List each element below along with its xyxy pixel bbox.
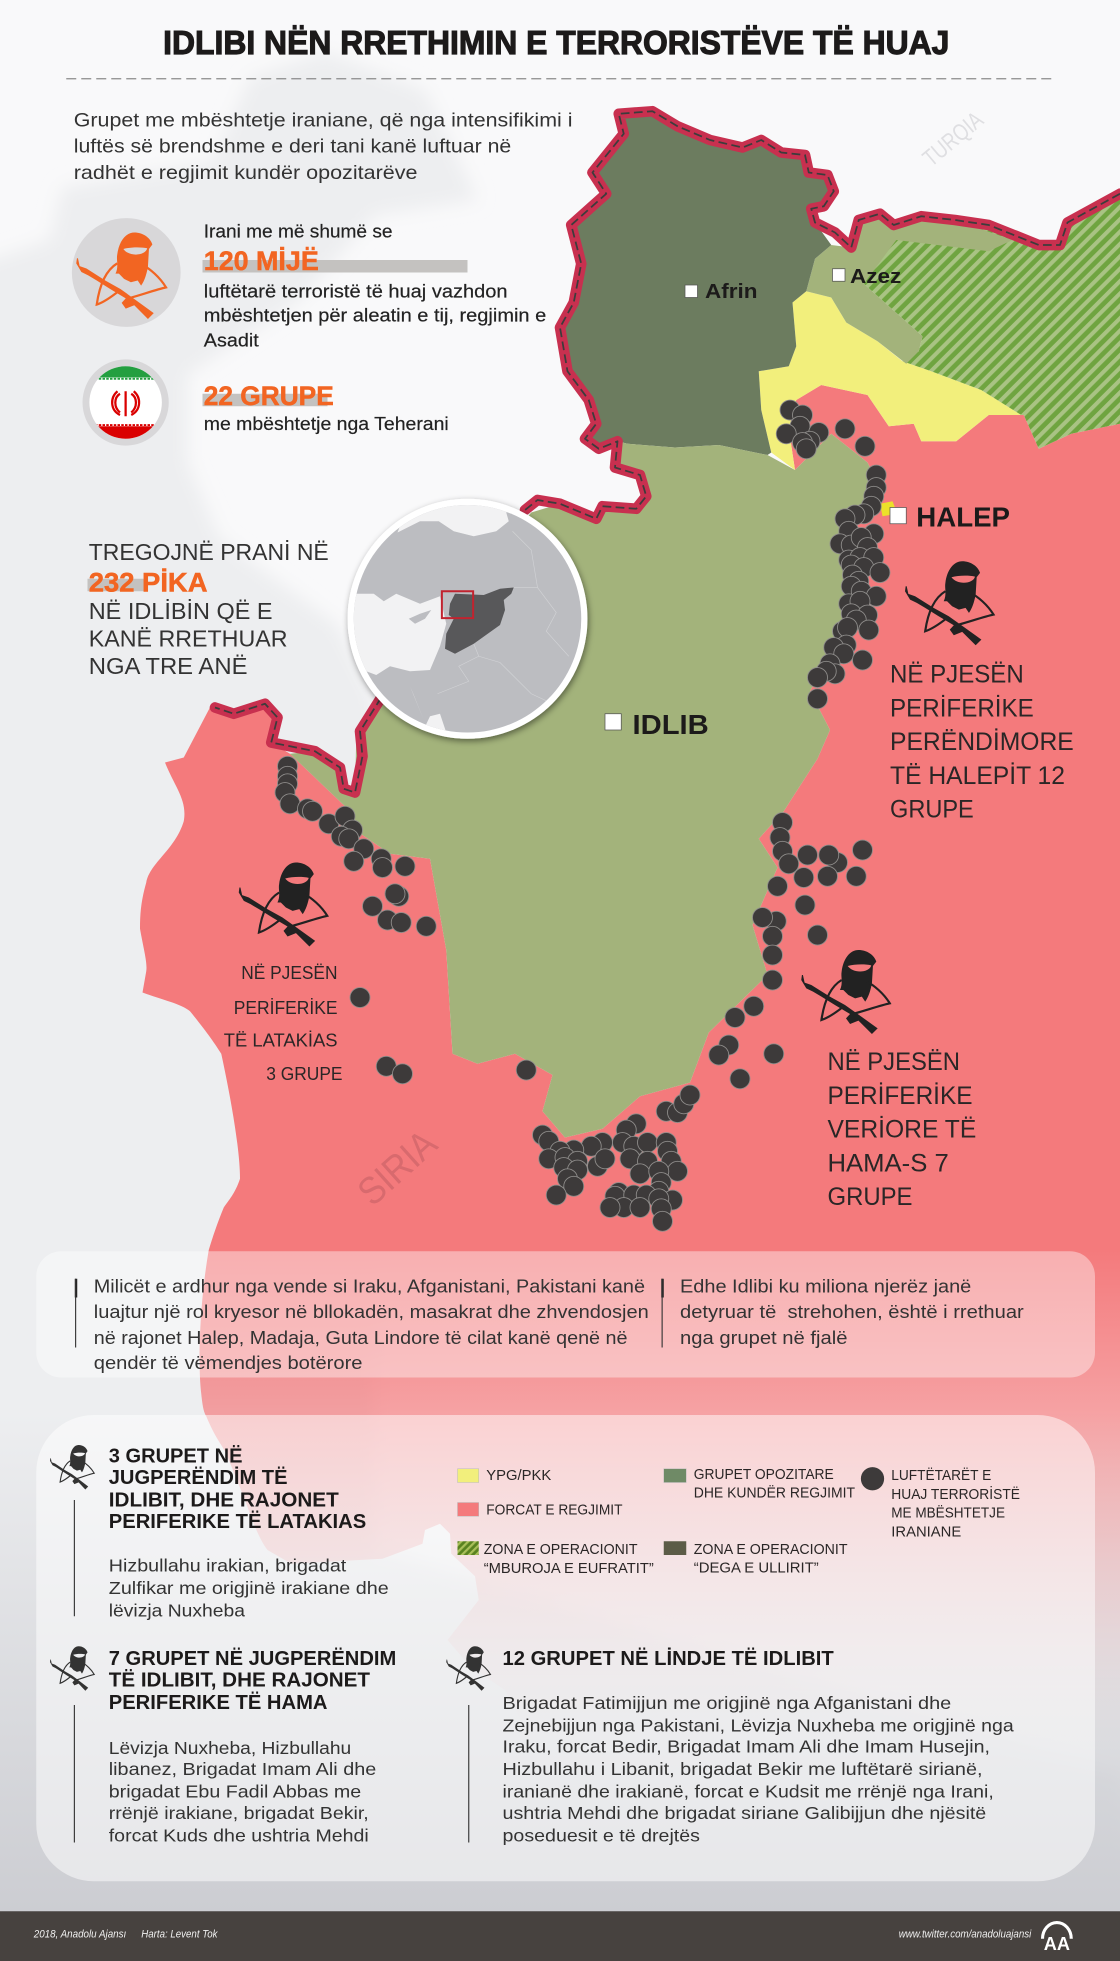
Turkish border line	[215, 111, 1120, 792]
block: 12 groups: Iraku, forcat Bedir, Brigadat Imam Ali dhe Imam Husejin,	[503, 1737, 990, 1757]
country label: Turkey: TURQIA	[918, 106, 989, 172]
block: 12 groups: Zejnebijjun nga Pakistani, Lëvizja Nuxheba me origjinë nga	[503, 1715, 1014, 1735]
block: 3 groups: PERIFERIKE TË LATAKIAS	[109, 1510, 366, 1533]
text: northern Hama periphery: HAMA-S 7	[827, 1149, 949, 1177]
text: Latakia periphery: 3 GRUPE	[266, 1064, 343, 1084]
block: 3 groups: Zulfikar me origjinë irakiane dhe	[109, 1578, 389, 1598]
intro text: radhët e regjimit kundër opozitarëve	[74, 162, 418, 184]
legend	[458, 1466, 1020, 1577]
opposition zone around Azez	[806, 214, 1012, 364]
block: 7 groups: 7 GRUPET NË JUGPERËNDIM	[109, 1647, 396, 1670]
legend item: opposition groups: GRUPET OPOZITARE	[694, 1466, 834, 1483]
city label: Azez	[832, 265, 901, 288]
legend item: foreign fighters: IRANIANE	[891, 1523, 961, 1540]
icon: fighter near Halep	[905, 561, 994, 645]
intro text: Grupet me mbështetje iraniane, që nga intensifikimi i	[74, 109, 572, 131]
left column text	[75, 1276, 649, 1373]
footer	[0, 1911, 1120, 1961]
legend item: Olive Branch: ZONA E OPERACIONIT	[694, 1541, 847, 1558]
block: 7 groups: Lëvizja Nuxheba, Hizbullahu	[109, 1738, 351, 1758]
legend item: foreign fighters: ME MBËSHTETJE	[891, 1504, 1005, 1521]
block: 7 groups: TË IDLIBIT, DHE RAJONET	[109, 1668, 370, 1691]
legend item: Euphrates Shield: “MBUROJA E EUFRATIT”	[484, 1560, 654, 1577]
block: 12 groups: iranianë dhe irakianë, forcat e Kudsit me rrënjë nga Irani,	[503, 1782, 994, 1802]
block: 12 groups: ushtria Mehdi dhe brigadat siriane Galibijjun dhe njësitë	[503, 1803, 986, 1823]
block: 12 groups: Brigadat Fatimijjun me origjinë nga Afganistani dhe	[503, 1693, 951, 1713]
block: 7 groups: rrënjë irakiane, brigadat Bekir,	[109, 1803, 369, 1823]
legend item: YPG/PKK	[458, 1467, 551, 1484]
stat: 22 groups: 22 GRUPE	[204, 381, 334, 411]
text: northern Hama periphery: VERİORE TË	[827, 1115, 976, 1144]
legend item: opposition groups: DHE KUNDËR REGJIMIT	[694, 1484, 855, 1501]
block: 3 groups: Hizbullahu irakian, brigadat	[109, 1555, 346, 1575]
right column text: detyruar të strehohen, është i rrethuar	[680, 1302, 1024, 1322]
block: 12 groups	[446, 1646, 1014, 1845]
block: 7 groups: brigadat Ebu Fadil Abbas me	[109, 1782, 361, 1802]
stat: 22 groups: me mbështetje nga Teherani	[204, 414, 449, 434]
left column text: në rajonet Halep, Madaja, Guta Lindore të cilat kanë qenë në	[94, 1328, 627, 1348]
intro text: luftës së brendshme e deri tani kanë luftuar në	[74, 135, 511, 157]
city label: Azez: Azez	[850, 265, 901, 288]
left column text: Milicët e ardhur nga vende si Iraku, Afganistani, Pakistani kanë	[94, 1276, 645, 1296]
block: 7 groups: libanez, Brigadat Imam Ali dhe	[109, 1759, 376, 1779]
legend item: Euphrates Shield: ZONA E OPERACIONIT	[484, 1541, 637, 1558]
stat: 232 points: NGA TRE ANË	[89, 653, 248, 679]
text: northern Hama periphery: GRUPE	[827, 1183, 912, 1211]
text: western Aleppo periphery	[890, 660, 1074, 824]
Euphrates Shield zone	[864, 194, 1120, 449]
opposition-held Idlib	[290, 434, 878, 1138]
inset locator map	[346, 494, 588, 740]
icon: Iranian flag badge	[83, 359, 169, 446]
footer credits: www.twitter.com/anadoluajansi	[899, 1929, 1032, 1941]
text: Latakia periphery: TË LATAKİAS	[224, 1030, 338, 1050]
stat: 120 thousand fighters: Asadit	[204, 330, 259, 350]
text: northern Hama periphery: NË PJESËN	[827, 1048, 960, 1076]
block: 12 groups: Hizbullahu i Libanit, brigadat Bekir me luftëtarë sirianë,	[503, 1759, 982, 1779]
block: 7 groups	[50, 1646, 396, 1845]
city label: Halep: HALEP	[916, 501, 1010, 532]
text: western Aleppo periphery: PERİFERİKE	[890, 693, 1034, 722]
icon: orange fighter badge	[72, 218, 181, 327]
regime-held territory	[140, 385, 1120, 1775]
panel: groups and legend	[36, 1415, 1095, 1881]
block: 7 groups: PERIFERIKE TË HAMA	[109, 1691, 328, 1714]
text: western Aleppo periphery: PERËNDİMORE	[890, 727, 1074, 756]
city label: Afrin	[685, 280, 758, 303]
text: northern Hama periphery: PERİFERİKE	[827, 1081, 972, 1110]
stat: 120 thousand fighters	[203, 221, 546, 350]
footer credits	[33, 1928, 1032, 1940]
text: northern Hama periphery	[828, 1048, 976, 1211]
text: Latakia periphery: PERİFERİKE	[234, 998, 338, 1018]
right column text: nga grupet në fjalë	[680, 1328, 847, 1348]
stat: 232 points: KANË RRETHUAR	[89, 625, 288, 651]
block: 3 groups: JUGPERËNDİM TË	[109, 1466, 288, 1489]
stat: 120 thousand fighters: luftëtarë terroristë të huaj vazhdon	[204, 281, 508, 301]
legend item: foreign fighters	[861, 1467, 1020, 1540]
panel: militia summary	[36, 1251, 1095, 1378]
legend item: Euphrates Shield	[458, 1541, 654, 1577]
stat: 232 points: TREGOJNË PRANİ NË	[89, 539, 329, 565]
foreign fighter position dots	[275, 400, 890, 1231]
block: 12 groups: poseduesit e të drejtës	[503, 1825, 700, 1845]
stat: 120 thousand fighters: mbështetjen për aleatin e tij, regjimin e	[204, 305, 546, 325]
right column text	[661, 1276, 1024, 1348]
country label: Syria: SIRIA	[350, 1122, 445, 1214]
right column text: Edhe Idlibi ku miliona njerëz janë	[680, 1276, 971, 1296]
footer credits: Harta: Levent Tok	[141, 1929, 218, 1941]
Olive Branch zone around Afrin	[560, 111, 834, 455]
stat: 120 thousand fighters: Irani me më shumë se	[204, 221, 393, 241]
block: 3 groups	[50, 1444, 389, 1620]
legend item: Olive Branch: “DEGA E ULLIRIT”	[694, 1559, 819, 1576]
YPG/PKK territory	[759, 291, 1021, 470]
legend item: regime forces: FORCAT E REGJIMIT	[486, 1501, 622, 1518]
intro text	[74, 109, 573, 184]
map of the Idlib region	[140, 106, 1120, 1775]
bottom background fade	[0, 1412, 1120, 1912]
small yellow patch at Halep	[880, 501, 898, 516]
text: western Aleppo periphery: NË PJESËN	[890, 661, 1024, 689]
icon: fighter near Hama	[801, 950, 890, 1034]
stat: 22 groups	[203, 381, 449, 434]
text: western Aleppo periphery: TË HALEPİT 12	[890, 761, 1065, 790]
block: 3 groups: lëvizja Nuxheba	[109, 1600, 245, 1620]
text: Latakia periphery: NË PJESËN	[241, 963, 338, 983]
block: 7 groups: forcat Kuds dhe ushtria Mehdi	[109, 1825, 369, 1845]
stat: 232 points: 232 PİKA	[89, 567, 208, 597]
icon: fighter near Latakia	[239, 862, 327, 946]
legend item: foreign fighters: LUFTËTARËT E	[891, 1467, 991, 1484]
text: western Aleppo periphery: GRUPE	[890, 796, 974, 824]
stat: 232 points	[88, 539, 329, 679]
city label: Afrin: Afrin	[705, 280, 757, 303]
block: 12 groups: 12 GRUPET NË LİNDJE TË IDLIBIT	[503, 1647, 834, 1670]
city label: Idlib: IDLIB	[632, 709, 709, 740]
left column text: qendër të vëmendjes botërore	[94, 1353, 363, 1373]
footer credits: 2018, Anadolu Ajansı	[33, 1929, 126, 1941]
left column text: luajtur një rol kryesor në bllokadën, masakrat dhe zhvendosjen	[94, 1302, 649, 1322]
legend item: Olive Branch	[664, 1541, 848, 1576]
stat: 232 points: NË IDLİBİN QË E	[89, 598, 273, 624]
icon: Anadolu Agency logo: AA	[1044, 1933, 1070, 1954]
legend item: opposition groups	[664, 1466, 855, 1501]
legend item: YPG/PKK: YPG/PKK	[486, 1467, 551, 1484]
stat: 120 thousand fighters: 120 MİJË	[204, 246, 319, 276]
block: 3 groups: IDLIBIT, DHE RAJONET	[109, 1489, 339, 1511]
text: Latakia periphery	[224, 963, 342, 1084]
icon: Anadolu Agency logo	[1042, 1922, 1071, 1954]
block: 3 groups: 3 GRUPET NË	[109, 1444, 243, 1467]
title: IDLIBI NËN RRETHIMIN E TERRORISTËVE TË HUAJ	[163, 24, 949, 62]
city label: Idlib	[605, 709, 709, 740]
legend item: foreign fighters: HUAJ TERRORİSTË	[891, 1485, 1020, 1503]
